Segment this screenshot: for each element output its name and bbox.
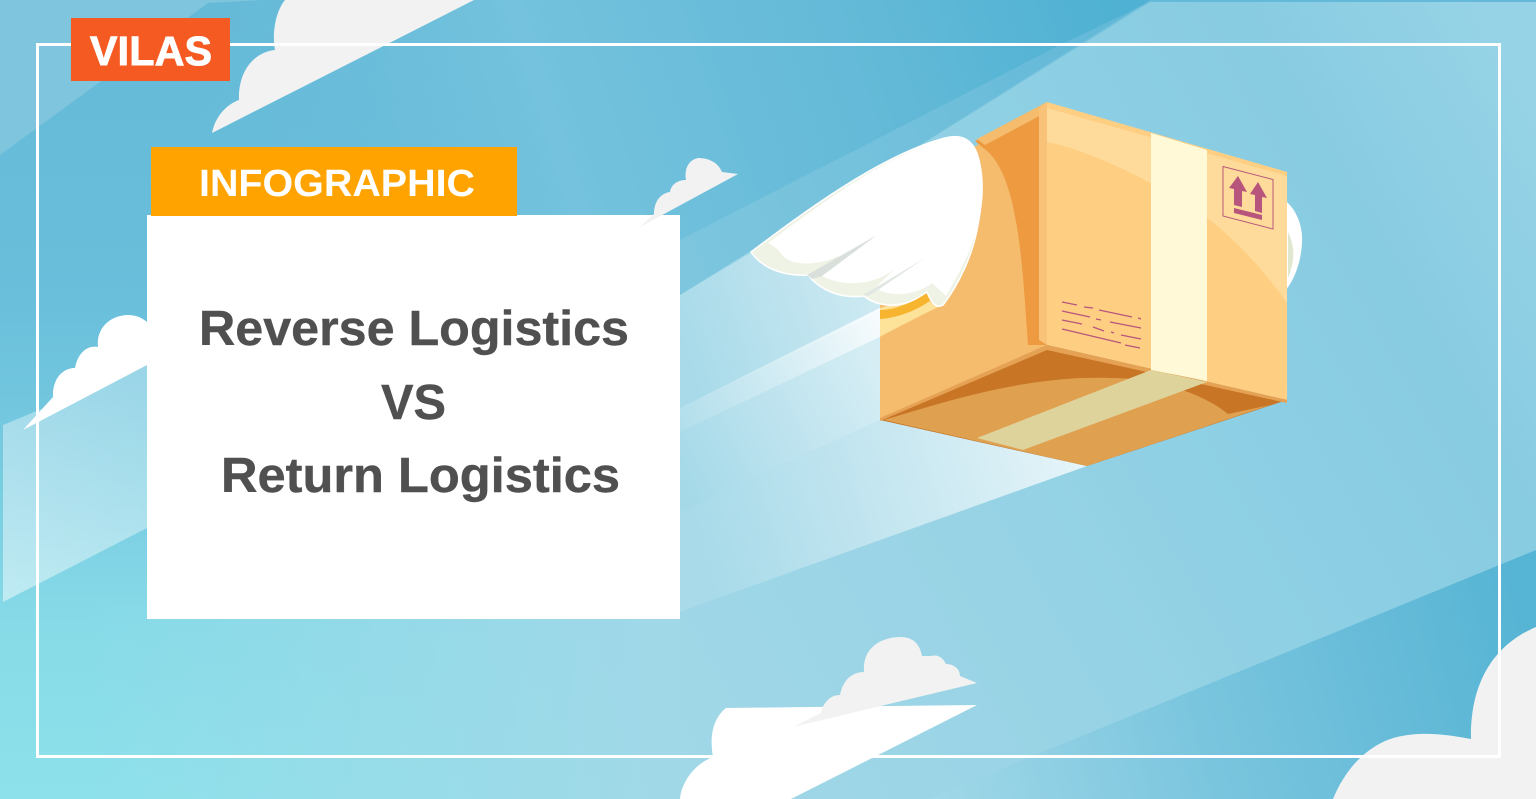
cloud: top left [212,0,474,133]
cloud: bottom right [1333,627,1536,799]
box left face [880,102,1047,420]
wing base: gold [880,292,940,336]
handling icon: this way up [1223,166,1273,229]
title text: VS [381,376,446,430]
cloud: bottom grey [793,637,977,727]
tape on front [1151,133,1207,381]
title text: Reverse Logistics [199,302,629,356]
logo: VILAS [71,18,230,81]
flying box illustration [751,102,1302,466]
printed text lines on box [1062,302,1141,348]
left wing [751,137,982,306]
box underside [880,345,1287,466]
title text: Return Logistics [221,449,620,503]
right wing [1286,201,1302,290]
cloud: left of card [23,315,147,430]
tape on underside [977,370,1207,450]
cloud: bottom white [680,705,977,799]
cloud: small centre [640,158,738,227]
logo: VILAS: VILAS [90,28,212,74]
tag: INFOGRAPHIC: INFOGRAPHIC [199,163,475,205]
box front face [1047,102,1287,400]
title card [147,215,680,619]
title text [199,302,629,503]
tag: INFOGRAPHIC [151,147,517,216]
light trails behind the box [680,252,1087,612]
